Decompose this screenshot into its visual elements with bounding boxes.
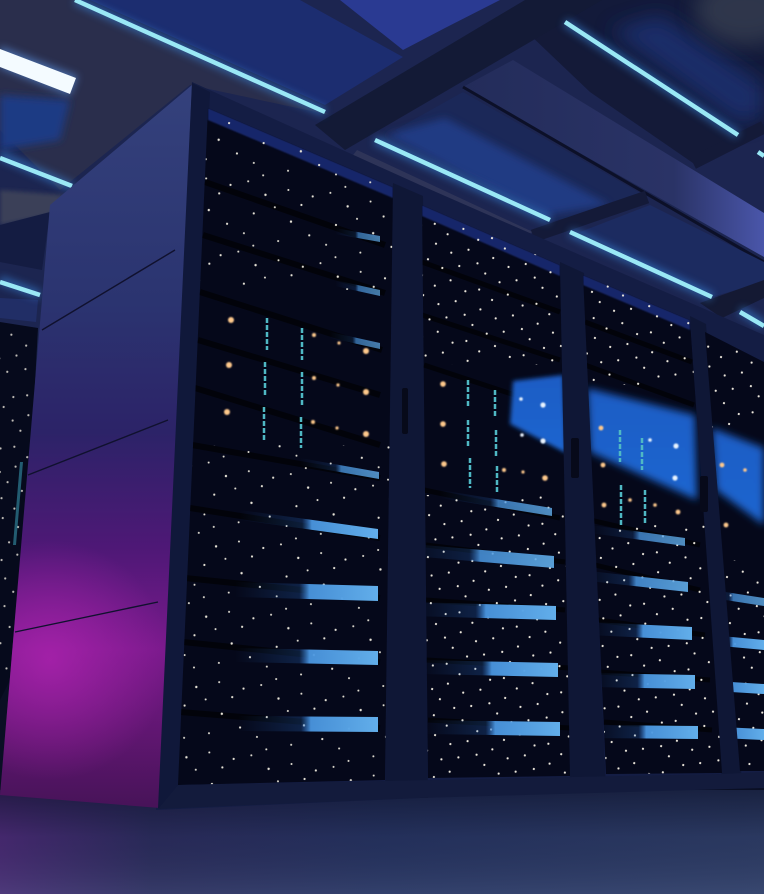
rack 4 blue light bars xyxy=(726,592,764,740)
rack frame pillars xyxy=(385,183,742,798)
rack 2 blue reflection xyxy=(510,375,566,453)
rack 4 glass door xyxy=(700,332,764,771)
ceiling: left dark panel xyxy=(0,212,50,270)
rack 3 top blue band xyxy=(583,275,690,330)
ceiling: dark panel above band xyxy=(527,22,738,163)
rack 2 glass door xyxy=(422,206,570,778)
white strip top left xyxy=(0,46,78,96)
rack 3 blue light bars xyxy=(597,526,698,739)
ceiling: blue glow beside strip xyxy=(385,118,610,215)
rack 1 shelf shading xyxy=(180,182,385,728)
rack side panel xyxy=(0,83,210,808)
ceiling: right dark area xyxy=(565,0,764,135)
background rack on the left xyxy=(0,322,38,700)
ceiling: blue wedge xyxy=(340,0,500,50)
rack base plinth xyxy=(158,772,764,809)
rack 1 blue light bars xyxy=(235,228,380,732)
rack 2 top blue band xyxy=(422,205,560,276)
rack 1 glass door xyxy=(175,108,395,785)
floor xyxy=(0,790,764,894)
ceiling beam xyxy=(315,0,602,150)
ceiling: blue panel above first strip xyxy=(90,0,403,105)
rack 3 shelf shading xyxy=(585,322,712,730)
rack 2 shelf shading xyxy=(422,262,570,728)
cross beam right xyxy=(533,127,764,236)
ceiling: top right haze xyxy=(695,0,764,45)
rack 3 status lights xyxy=(599,426,680,525)
ceiling: left grey panel xyxy=(0,190,65,225)
rack 3 glass door xyxy=(580,275,725,775)
ceiling light strips xyxy=(0,0,764,326)
cross beam lower right xyxy=(700,280,764,318)
ceiling: panel under band xyxy=(395,92,647,222)
ceiling: left lit panel xyxy=(0,95,70,150)
rack 4 blue reflection xyxy=(712,428,764,525)
ceiling: right blue glow xyxy=(610,15,764,125)
ceiling xyxy=(0,0,764,420)
ceiling: right lower panel xyxy=(580,205,764,297)
rack 1 top blue band xyxy=(208,108,393,198)
ceiling: broad grey-blue band xyxy=(463,60,764,257)
rack 4 status lights xyxy=(720,463,747,527)
ceiling: grey ledge below strip xyxy=(340,150,533,250)
rack 3 blue reflection xyxy=(587,388,697,500)
ceiling: left lower blue panel xyxy=(0,298,38,322)
rack 1 status lights xyxy=(224,317,369,448)
door handles xyxy=(402,388,708,512)
rack 2 status lights xyxy=(440,380,548,492)
rack row front frame xyxy=(156,82,764,810)
rack 2 blue light bars xyxy=(426,492,560,736)
ceiling: upper left grey panel xyxy=(0,0,330,190)
